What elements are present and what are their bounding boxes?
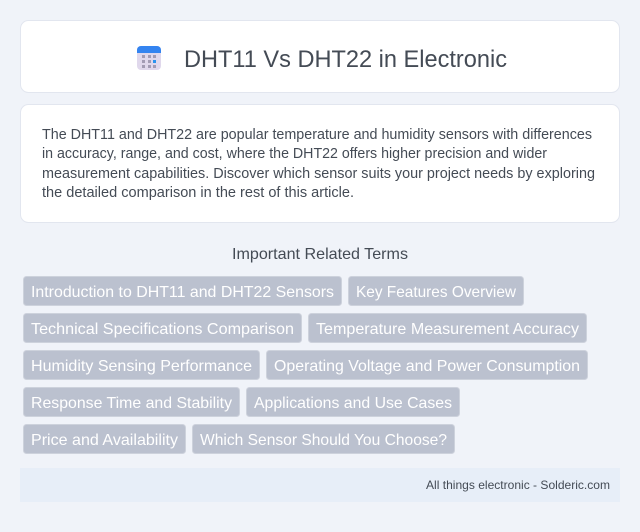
icon: calendar [137,46,161,70]
tag: temperature accuracy: Temperature Measurement Accuracy [316,321,579,338]
panel: intro paragraph: measurement capabilities. Discover which sensor suits your project needs by exploring [42,166,595,182]
tag: response time: Response Time and Stability [31,395,232,412]
tag: technical specifications: Technical Specifications Comparison [31,321,294,338]
tag: applications: Applications and Use Cases [254,395,452,412]
panel: intro paragraph: The DHT11 and DHT22 are popular temperature and humidity sensors with differences [42,127,592,143]
heading: important related terms: Important Related Terms [232,246,408,263]
tag list [24,276,588,454]
title: DHT11 Vs DHT22 in Electronic [184,46,507,73]
tag: response time [24,388,240,416]
panel: intro paragraph: the detailed comparison in the rest of this article. [42,185,354,201]
footer: All things electronic - Solderic.com [426,478,610,492]
tag: humidity sensing [24,350,260,380]
tag: operating voltage: Operating Voltage and Power Consumption [274,358,580,375]
tag: temperature accuracy [308,314,586,342]
tag: price [24,424,186,454]
footer [20,468,620,502]
tag: introduction: Introduction to DHT11 and DHT22 Sensors [31,284,334,301]
tag: which sensor [192,424,454,454]
tag: introduction [24,276,342,306]
tag: humidity sensing: Humidity Sensing Performance [31,358,252,375]
tag: operating voltage [266,350,588,380]
tag: applications [246,388,460,416]
panel: intro paragraph [20,104,620,222]
tag: technical specifications [24,314,302,342]
tag: key features [348,276,524,306]
tag: key features: Key Features Overview [356,284,516,301]
tag: price: Price and Availability [31,432,178,449]
panel: intro paragraph: in accuracy, range, and cost, where the DHT22 offers higher precision and wider [42,146,547,162]
tag: which sensor: Which Sensor Should You Choose? [200,432,447,449]
header panel [20,20,620,92]
